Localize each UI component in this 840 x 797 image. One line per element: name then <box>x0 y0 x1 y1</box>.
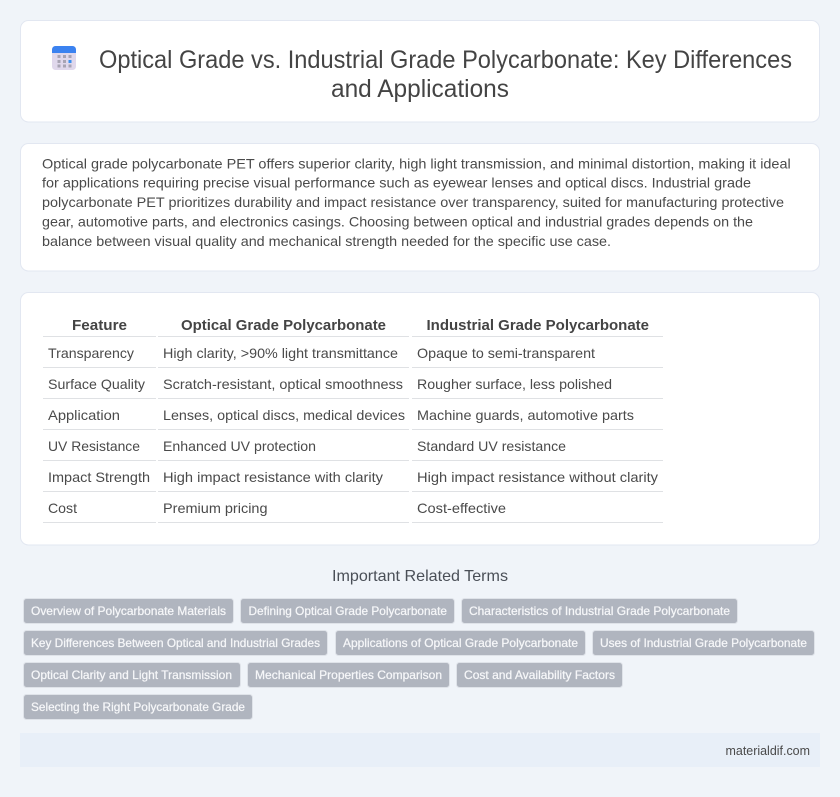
row: transparency: Transparency <box>48 345 134 361</box>
panel: introduction text: Optical grade polycarbonate PET offers superior clarity, high light transmission, and minimal distortion, making it ideal <box>42 155 791 171</box>
row: transparency: Opaque to semi-transparent <box>417 345 595 361</box>
row: uv resistance: UV Resistance <box>48 438 140 454</box>
tag <box>336 630 586 656</box>
row: cost <box>48 500 506 516</box>
panel: comparison table <box>20 292 820 545</box>
tag: Mechanical Properties Comparison <box>255 668 442 682</box>
footer: materialdif.com <box>726 744 810 758</box>
table header row <box>72 317 649 334</box>
tag: Uses of Industrial Grade Polycarbonate <box>600 636 807 650</box>
row: surface quality: Scratch-resistant, optical smoothness <box>163 376 403 392</box>
tag <box>24 598 234 624</box>
row: cost: Cost-effective <box>417 500 506 516</box>
title <box>99 46 792 103</box>
row: uv resistance: Enhanced UV protection <box>163 438 316 454</box>
tag: Characteristics of Industrial Grade Polycarbonate <box>469 604 730 618</box>
tag: Overview of Polycarbonate Materials <box>31 604 226 618</box>
tag <box>592 630 814 656</box>
row: application: Machine guards, automotive parts <box>417 407 634 423</box>
related terms tags <box>24 598 814 720</box>
row: application: Lenses, optical discs, medical devices <box>163 407 405 423</box>
panel: introduction text <box>20 144 820 271</box>
row: impact strength: High impact resistance without clarity <box>417 469 658 485</box>
title: Optical Grade vs. Industrial Grade Polycarbonate: Key Differences <box>99 46 792 74</box>
tag <box>24 662 240 688</box>
tag: Key Differences Between Optical and Industrial Grades <box>31 636 320 650</box>
tag: Applications of Optical Grade Polycarbonate <box>343 636 578 650</box>
heading: important related terms: Important Related Terms <box>332 568 508 585</box>
row: surface quality <box>48 376 612 392</box>
table header row: Industrial Grade Polycarbonate <box>426 317 649 334</box>
panel: header <box>20 20 820 122</box>
tag: Selecting the Right Polycarbonate Grade <box>31 700 245 714</box>
row: surface quality: Rougher surface, less polished <box>417 376 612 392</box>
row: impact strength: High impact resistance with clarity <box>163 469 383 485</box>
panel: introduction text: balance between visual quality and mechanical strength needed for the specific use case. <box>42 233 611 249</box>
panel: introduction text: polycarbonate PET prioritizes durability and impact resistance over transparency, suited for manufacturing protective <box>42 194 784 210</box>
panel: introduction text: gear, automotive parts, and electronics casings. Choosing between optical and industrial grades depends on the <box>42 214 753 230</box>
panel: introduction text: for applications requiring precise visual performance such as eyewear lenses and optical discs. Industrial grade <box>42 175 751 191</box>
row: application: Application <box>48 407 120 423</box>
tag <box>462 598 738 624</box>
table header row: Optical Grade Polycarbonate <box>181 317 386 334</box>
tag <box>240 598 454 624</box>
icon: calendar grid <box>52 46 76 70</box>
tag <box>248 662 450 688</box>
row: application <box>48 407 634 423</box>
row: uv resistance <box>48 438 566 454</box>
footer <box>20 733 820 767</box>
row: surface quality: Surface Quality <box>48 376 145 392</box>
title: and Applications <box>331 75 509 103</box>
row: transparency <box>48 345 595 361</box>
table header row: Feature <box>72 317 127 334</box>
tag <box>456 662 622 688</box>
row: cost: Premium pricing <box>163 500 268 516</box>
row: impact strength: Impact Strength <box>48 469 150 485</box>
tag: Optical Clarity and Light Transmission <box>31 668 232 682</box>
row: uv resistance: Standard UV resistance <box>417 438 566 454</box>
row: transparency: High clarity, >90% light transmittance <box>163 345 398 361</box>
tag <box>24 630 328 656</box>
row: impact strength <box>48 469 658 485</box>
tag <box>24 694 252 720</box>
row: cost: Cost <box>48 500 77 516</box>
tag: Cost and Availability Factors <box>464 668 615 682</box>
tag: Defining Optical Grade Polycarbonate <box>248 604 447 618</box>
